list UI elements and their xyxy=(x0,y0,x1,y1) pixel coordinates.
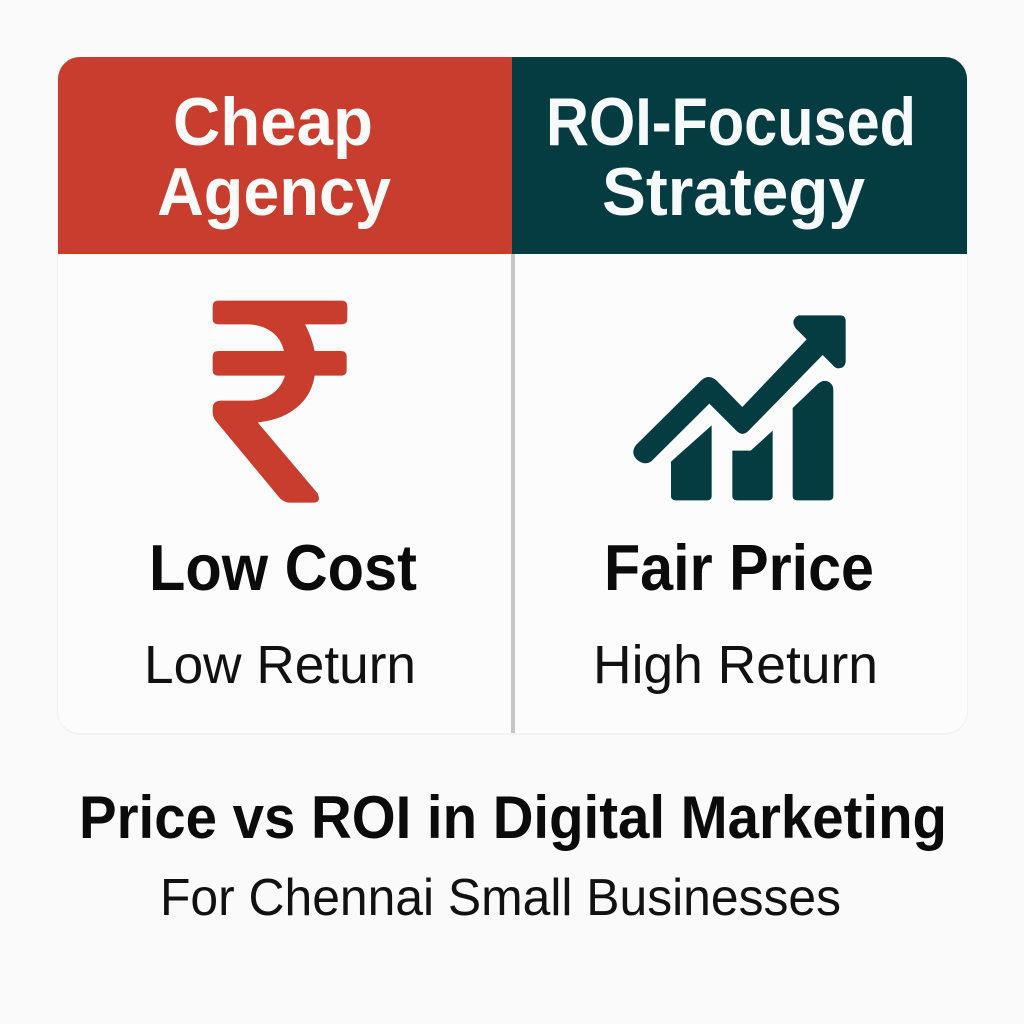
icon: rupee symbol xyxy=(213,301,347,503)
chart arrow xyxy=(633,315,846,463)
chart bar 1 xyxy=(671,425,712,500)
chart bar 2 xyxy=(732,431,773,500)
column divider xyxy=(511,254,515,733)
label: high return: High Return xyxy=(593,636,878,695)
panel: cheap agency header xyxy=(58,57,512,254)
subtitle: For Chennai Small Businesses xyxy=(160,869,841,927)
heading: roi-focused strategy: Strategy xyxy=(602,155,865,230)
heading: roi-focused strategy xyxy=(546,85,916,230)
title: Price vs ROI in Digital Marketing xyxy=(79,784,947,851)
panel: roi-focused header xyxy=(512,57,967,254)
icon: rising bar chart with arrow xyxy=(633,315,846,500)
comparison card xyxy=(57,57,968,735)
label: fair price: Fair Price xyxy=(604,532,874,604)
heading: roi-focused strategy: ROI-Focused xyxy=(546,85,916,160)
label: low return: Low Return xyxy=(144,636,416,695)
heading: cheap agency: Agency xyxy=(157,155,391,230)
heading: cheap agency: Cheap xyxy=(173,85,373,160)
heading: cheap agency xyxy=(157,85,391,230)
label: low cost: Low Cost xyxy=(149,532,417,604)
chart bar 3 xyxy=(793,381,833,500)
